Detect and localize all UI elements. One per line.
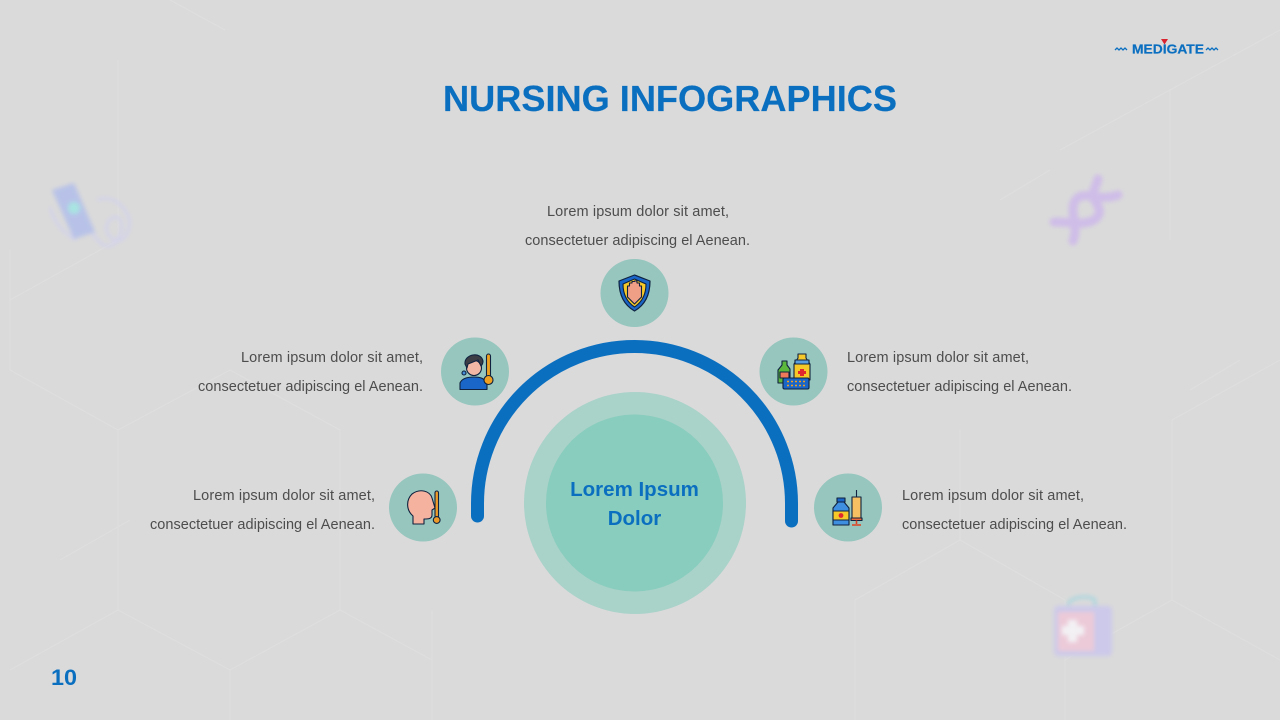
text: top: Lorem ipsum dolor sit amet, [547, 204, 729, 220]
page number: 10 [51, 665, 77, 690]
icon: medicines [778, 354, 810, 389]
icon: shield with hand [619, 275, 650, 311]
central label: Dolor [608, 507, 661, 530]
item: lower right [814, 474, 1127, 542]
icon: feverish person [460, 354, 493, 390]
text: lower right: Lorem ipsum dolor sit amet, [902, 488, 1084, 504]
icon: head with thermometer [408, 491, 440, 524]
arc [478, 346, 792, 521]
central circle [524, 392, 746, 614]
text: upper right: Lorem ipsum dolor sit amet, [847, 350, 1029, 366]
text: upper left: consectetuer adipiscing el Aenean. [198, 379, 423, 395]
text: top: consectetuer adipiscing el Aenean. [525, 233, 750, 249]
text: upper right: consectetuer adipiscing el Aenean. [847, 379, 1072, 395]
decoration: DNA helix [1054, 179, 1118, 241]
item: top [525, 204, 750, 327]
text: lower left: Lorem ipsum dolor sit amet, [193, 488, 375, 504]
icon: vial and syringe [833, 490, 862, 525]
decoration: medical device [50, 183, 130, 246]
item: lower left [150, 474, 457, 542]
text: lower left: consectetuer adipiscing el Aenean. [150, 517, 375, 533]
item: upper left [198, 338, 509, 406]
item: upper right [760, 338, 1072, 406]
text: lower right: consectetuer adipiscing el Aenean. [902, 517, 1127, 533]
logo [1115, 39, 1218, 56]
text: upper left: Lorem ipsum dolor sit amet, [241, 350, 423, 366]
decoration: first aid kit [1054, 597, 1112, 656]
title: NURSING INFOGRAPHICS [443, 78, 897, 119]
central label: Lorem Ipsum [570, 478, 699, 501]
logo: MEDIGATE [1132, 42, 1204, 56]
